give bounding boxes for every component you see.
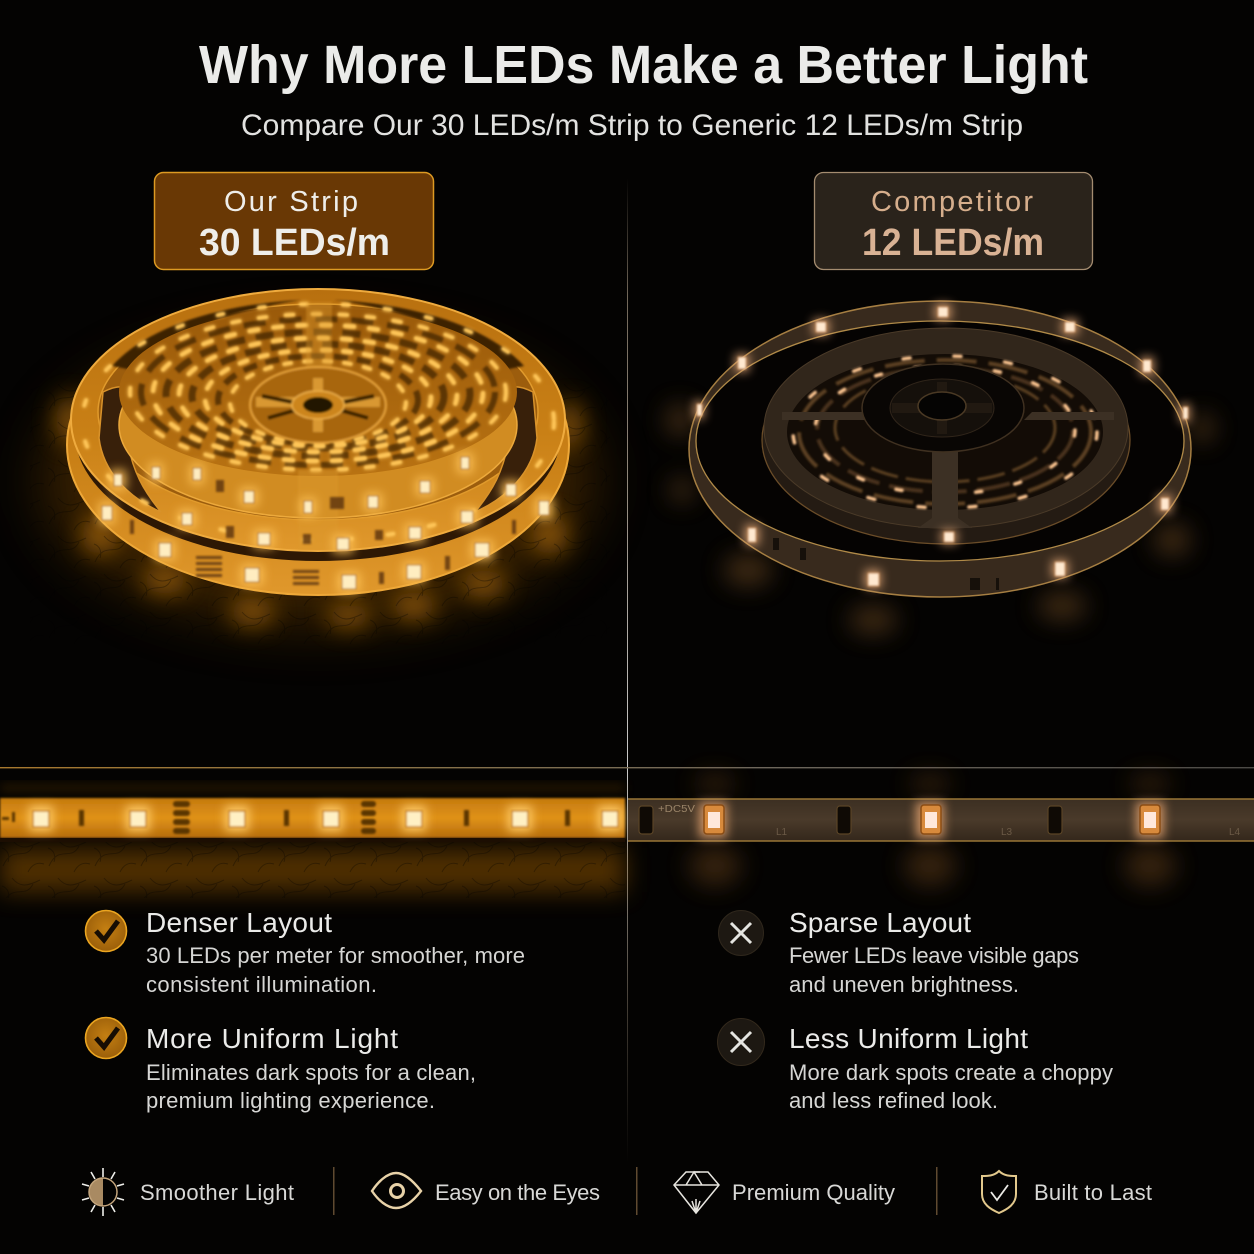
second coil (71, 289, 565, 551)
icon: cross (718, 1018, 764, 1066)
strip print (658, 804, 1241, 838)
LED chips (697, 307, 1188, 586)
coil opening (787, 354, 1103, 510)
inner flange (764, 328, 1128, 528)
floor glow (666, 404, 1214, 634)
PCB marks (130, 480, 516, 585)
outer coil band (689, 301, 1191, 597)
strip print: L3 (1001, 827, 1013, 838)
dark LED pads (639, 806, 1062, 834)
floor glow (30, 335, 610, 650)
inner stack wall (119, 332, 517, 518)
LED glow halos (99, 453, 553, 592)
title: Why More LEDs Make a Better Light (199, 35, 1088, 95)
right reel: dim 12 LEDs/m strip coil (666, 301, 1214, 634)
subtitle: Compare Our 30 LEDs/m Strip to Generic 12 LEDs/m Strip (241, 109, 1023, 142)
benefit: denser layout (146, 907, 525, 997)
icon: eye (372, 1173, 421, 1208)
LED halos (699, 802, 1164, 838)
central opening (696, 321, 1184, 561)
bottom coil (67, 295, 569, 595)
benefit: more uniform light (146, 1023, 476, 1113)
benefit: denser layout: 30 LEDs per meter for smoother, more (146, 943, 525, 968)
center divider (627, 178, 628, 1163)
drawback: sparse layout (789, 907, 1079, 997)
under-strip glow (689, 775, 1176, 886)
LED glow halos (694, 304, 1190, 588)
coiled LED dash glow (82, 304, 554, 540)
reel flange windows (98, 304, 538, 520)
benefit: more uniform light: premium lighting experience. (146, 1088, 435, 1113)
badge: our strip (154, 172, 434, 270)
drawback: sparse layout: Sparse Layout (789, 907, 971, 938)
label: premium quality: Premium Quality (732, 1180, 895, 1205)
LED chips (33, 811, 618, 827)
badge: competitor (814, 172, 1092, 270)
under-strip glow (0, 784, 625, 898)
left straight strip: 30 LEDs/m (0, 784, 625, 898)
LED halos (29, 806, 622, 831)
reel hub (250, 367, 386, 443)
coil slits (799, 360, 1091, 504)
LED chips (102, 457, 549, 589)
horizontal separator (0, 767, 1254, 768)
badge: competitor: Competitor (871, 186, 1033, 218)
spiral shading (141, 319, 495, 465)
icon: check (86, 1018, 126, 1058)
benefit: denser layout: Denser Layout (146, 907, 332, 938)
PCB marks (773, 538, 999, 590)
benefit: denser layout: consistent illumination. (146, 972, 377, 997)
warm coil highlights (793, 356, 1097, 508)
reel spokes (782, 412, 1114, 528)
panel: competitor drawbacks (718, 907, 1113, 1113)
left reel: glowing 30 LEDs/m strip coil (30, 289, 610, 650)
drawback: less uniform light (789, 1023, 1113, 1113)
icon: cross (718, 910, 764, 956)
reel hub (862, 364, 1024, 452)
coiled LED dashes (82, 304, 554, 540)
badge: competitor: 12 LEDs/m (862, 222, 1044, 264)
label: easy on the eyes: Easy on the Eyes (435, 1180, 600, 1205)
label: smoother light: Smoother Light (140, 1180, 294, 1205)
right straight strip: 12 LEDs/m (628, 775, 1254, 886)
central vertical seam (298, 302, 338, 550)
badge: our strip: 30 LEDs/m (199, 222, 390, 264)
LED chips (704, 805, 1160, 834)
drawback: less uniform light: and less refined look. (789, 1088, 998, 1113)
solder pads and marks (2, 801, 570, 834)
footer features (82, 1167, 1152, 1216)
drawback: less uniform light: Less Uniform Light (789, 1023, 1028, 1054)
benefit: more uniform light: More Uniform Light (146, 1023, 398, 1054)
strip print: L4 (1229, 827, 1241, 838)
strip print: +DC5V (658, 804, 695, 815)
icon: diamond (674, 1172, 719, 1213)
badge: our strip: Our Strip (224, 186, 358, 218)
strip print: L1 (776, 827, 788, 838)
inner stack base (762, 336, 1130, 544)
label: built to last: Built to Last (1034, 1180, 1152, 1205)
drawback: sparse layout: and uneven brightness. (789, 972, 1019, 997)
inner stack top face (119, 308, 517, 476)
icon: check (86, 910, 126, 952)
panel: our strip benefits (86, 907, 525, 1113)
drawback: less uniform light: More dark spots create a choppy (789, 1060, 1113, 1085)
drawback: sparse layout: Fewer LEDs leave visible gaps (789, 943, 1079, 968)
dark gap (75, 305, 561, 561)
icon: shield (982, 1171, 1016, 1213)
icon: sun (82, 1168, 124, 1216)
benefit: more uniform light: Eliminates dark spots for a clean, (146, 1060, 476, 1085)
